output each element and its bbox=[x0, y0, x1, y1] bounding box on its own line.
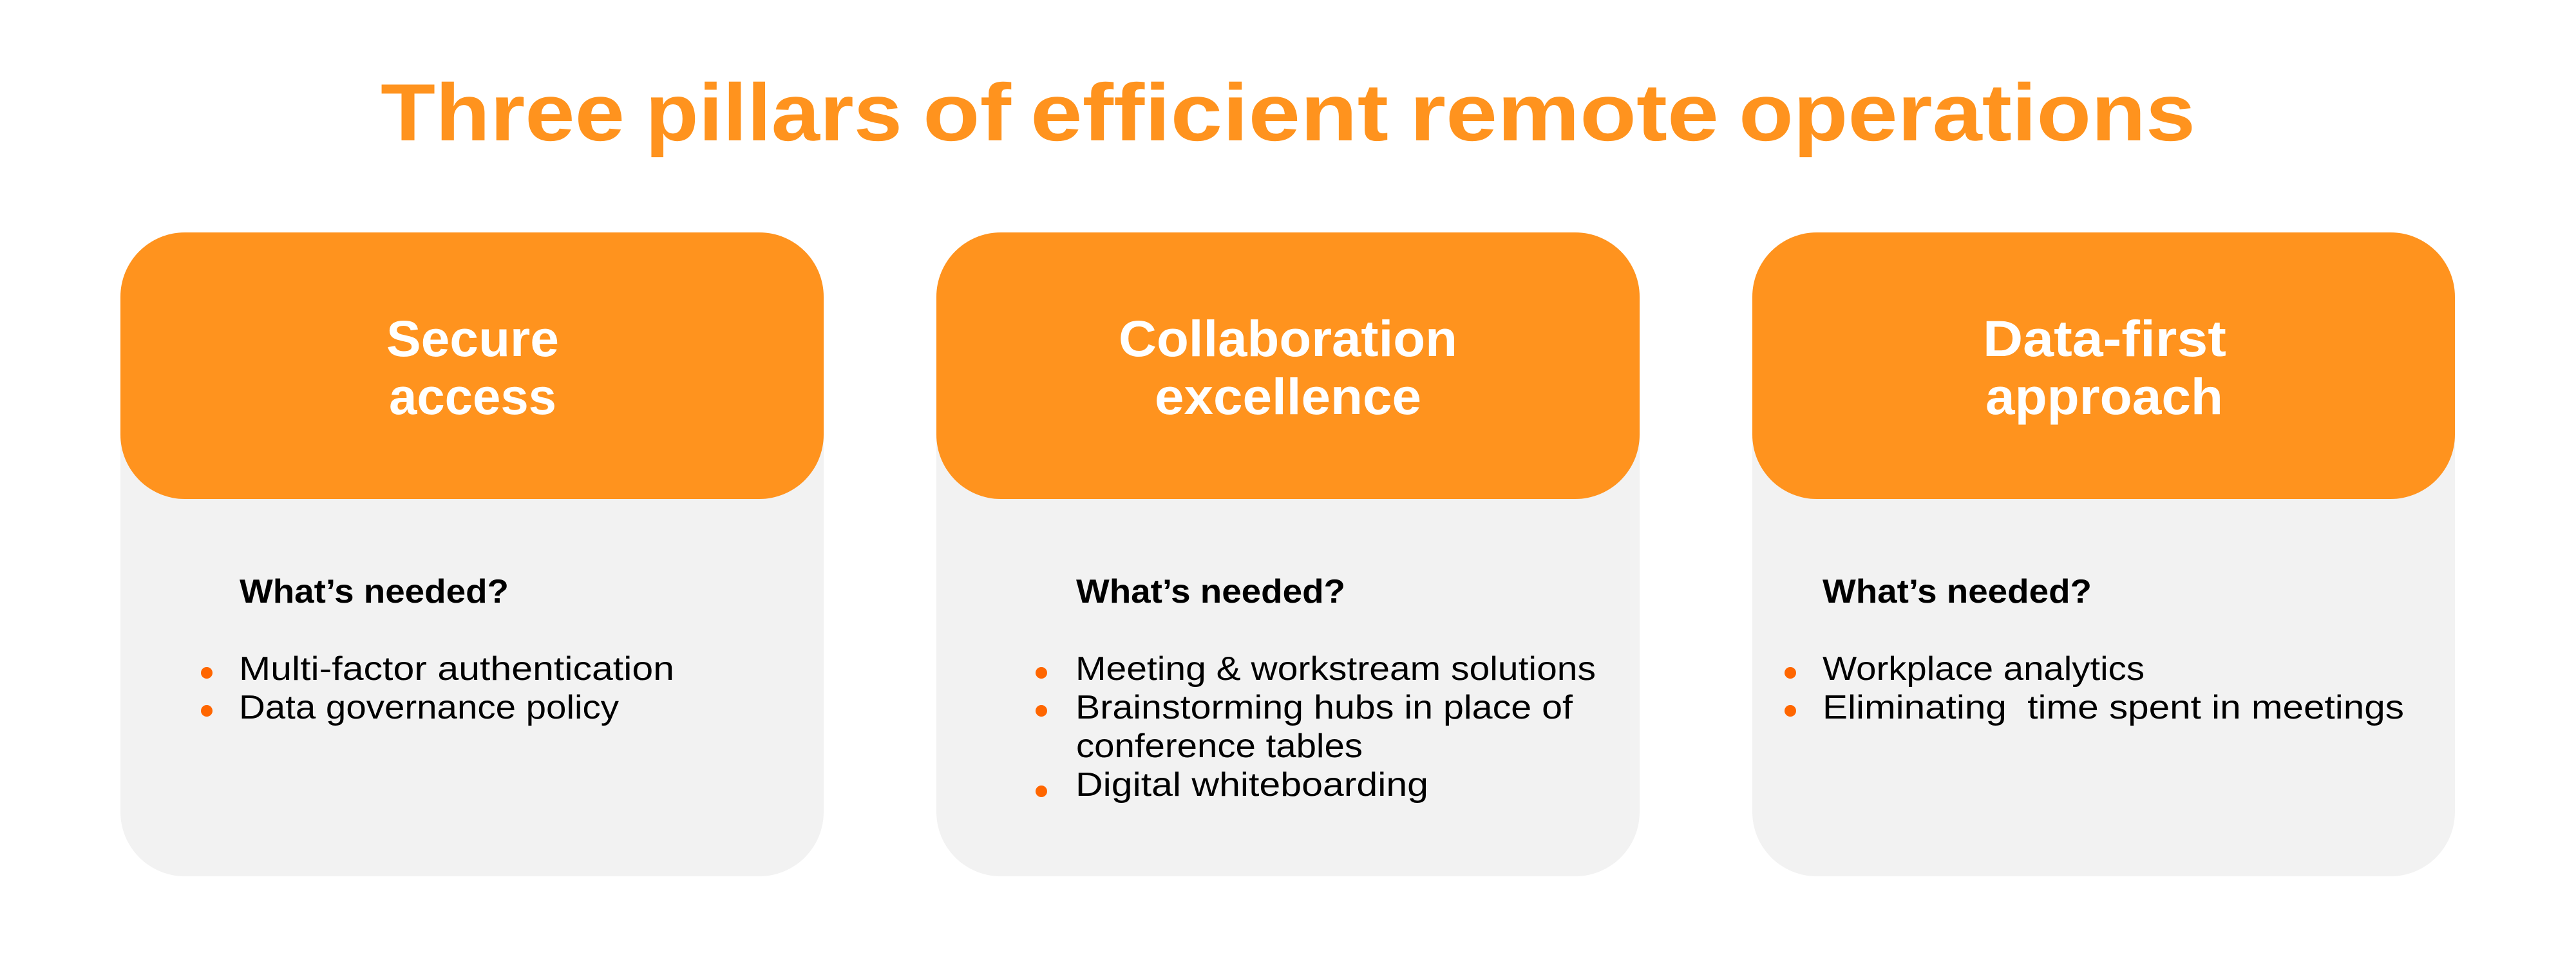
bullet list bbox=[1036, 650, 1596, 804]
header block bbox=[936, 232, 1640, 499]
subheading: What’s needed? bbox=[1823, 573, 2092, 610]
panel background bbox=[120, 232, 824, 876]
bullet list: Eliminating time spent in meetings bbox=[1823, 689, 2404, 726]
header block bbox=[1752, 232, 2455, 499]
bullet list: conference tables bbox=[1076, 728, 1363, 765]
subheading: What’s needed? bbox=[240, 573, 509, 610]
heading: approach bbox=[1985, 368, 2223, 425]
bullet list bbox=[201, 650, 674, 726]
bullet list: Digital whiteboarding bbox=[1075, 766, 1428, 804]
bullet list: Brainstorming hubs in place of bbox=[1075, 689, 1573, 726]
panel: collaboration excellence bbox=[936, 232, 1640, 876]
title: operations bbox=[1739, 67, 2195, 158]
panel background bbox=[936, 232, 1640, 876]
bullet list bbox=[1785, 650, 2404, 726]
title: Three bbox=[381, 67, 625, 158]
bullet list: Meeting & workstream solutions bbox=[1075, 650, 1596, 688]
bullet list: Workplace analytics bbox=[1823, 650, 2145, 688]
title: of bbox=[923, 67, 1012, 158]
heading: Collaboration bbox=[1119, 310, 1457, 367]
heading: Secure bbox=[386, 310, 559, 367]
bullet list: Multi-factor authentication bbox=[239, 650, 674, 688]
heading: Data-first bbox=[1983, 310, 2226, 367]
title: remote bbox=[1410, 67, 1719, 158]
subheading: What’s needed? bbox=[1076, 573, 1345, 610]
panel: data-first approach bbox=[1752, 232, 2455, 876]
title: efficient bbox=[1030, 67, 1388, 158]
heading bbox=[1119, 310, 1457, 425]
panel: secure access bbox=[120, 232, 824, 876]
bullet list: Data governance policy bbox=[239, 689, 619, 726]
panel background bbox=[1752, 232, 2455, 876]
heading bbox=[386, 310, 559, 425]
heading: excellence bbox=[1155, 368, 1421, 425]
header block bbox=[120, 232, 824, 499]
heading bbox=[1983, 310, 2226, 425]
title: pillars bbox=[645, 67, 902, 158]
heading: access bbox=[389, 368, 556, 425]
title bbox=[381, 67, 2195, 158]
